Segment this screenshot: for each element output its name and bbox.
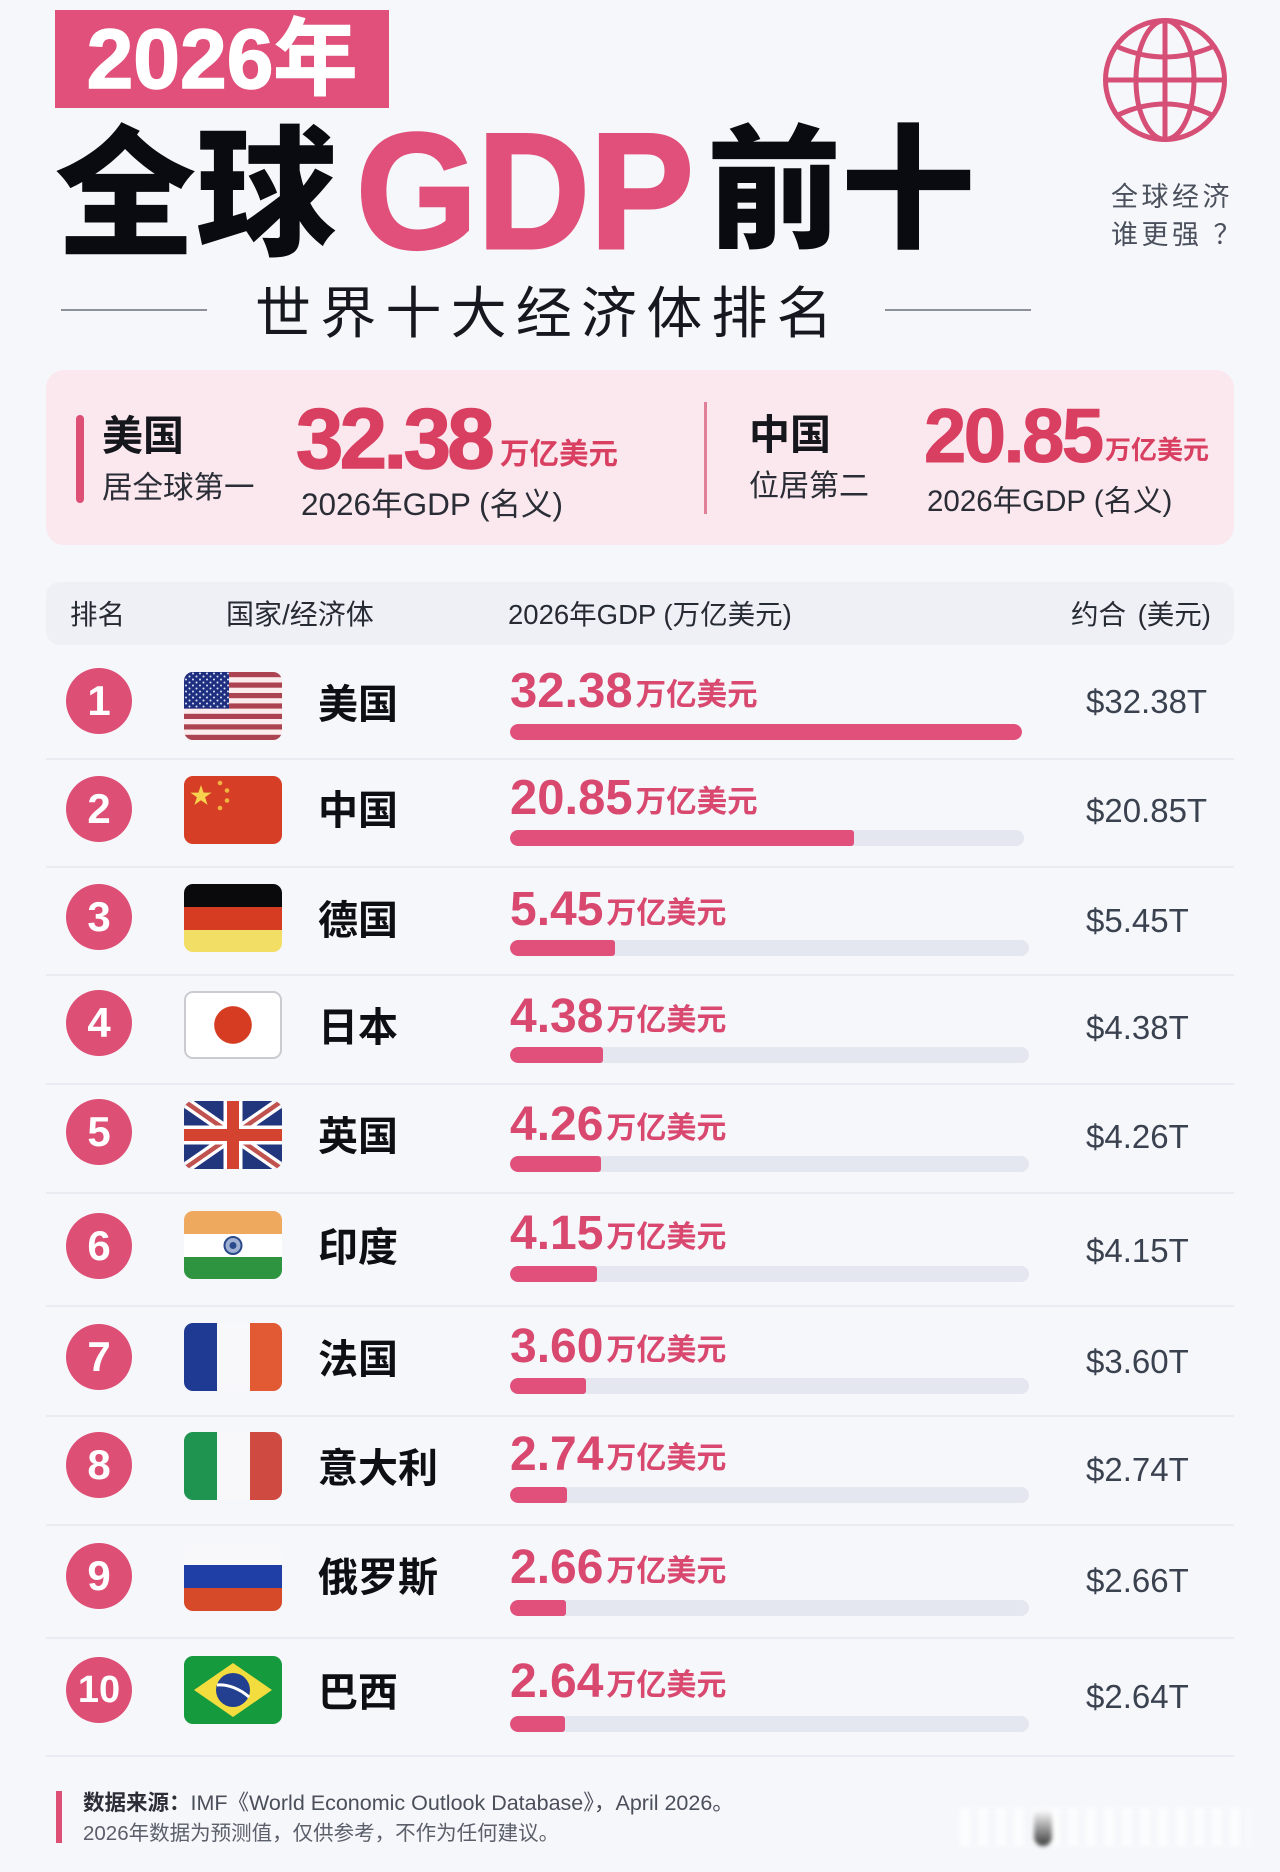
- gdp value: 4.38万亿美元: [510, 990, 726, 1043]
- usd value: $2.64T: [1086, 1678, 1189, 1715]
- rank badge: [66, 668, 132, 734]
- US unit: 万亿美元: [500, 438, 618, 471]
- gdp bar: [510, 1378, 1029, 1394]
- subtitle: 世界十大经济体排名: [255, 282, 842, 345]
- row 10: Brazil: [46, 1637, 1234, 1757]
- row 7: France: [46, 1305, 1234, 1417]
- country name: 中国: [318, 789, 398, 833]
- gdp bar: [510, 724, 1022, 740]
- rank badge: 10: [78, 1669, 120, 1711]
- rank badge: [66, 1213, 132, 1279]
- icon: globe: [1103, 18, 1227, 142]
- icon: France flag: [184, 1323, 282, 1391]
- China unit: 万亿美元: [1105, 435, 1209, 465]
- gdp bar: [510, 1600, 1029, 1616]
- usd value: $4.26T: [1086, 1118, 1189, 1155]
- usd value: $5.45T: [1086, 902, 1189, 939]
- rank badge: [66, 1432, 132, 1498]
- header: usd: 约合 (美元): [1071, 599, 1211, 630]
- gdp bar: [510, 1487, 1029, 1503]
- rank badge: [66, 990, 132, 1056]
- rank badge: [66, 776, 132, 842]
- row 2: China: [46, 758, 1234, 868]
- icon: Brazil flag: [184, 1656, 282, 1724]
- country name: 巴西: [318, 1671, 398, 1715]
- usd value: $32.38T: [1086, 683, 1207, 720]
- gdp value: 2.66万亿美元: [510, 1541, 726, 1594]
- footer line 2: 2026年数据为预测值，仅供参考，不作为任何建议。: [83, 1822, 559, 1845]
- country name: 日本: [318, 1006, 398, 1050]
- header: country: 国家/经济体: [226, 599, 374, 630]
- header: rank: 排名: [70, 599, 125, 630]
- country name: 美国: [318, 683, 398, 727]
- icon: Germany flag: [184, 884, 282, 952]
- icon: Italy flag: [184, 1432, 282, 1500]
- gdp bar: [510, 1266, 1029, 1282]
- usd value: $4.15T: [1086, 1232, 1189, 1269]
- gdp value: 4.26万亿美元: [510, 1098, 726, 1151]
- row 4: Japan: [46, 974, 1234, 1085]
- panel: top two summary: [46, 370, 1234, 545]
- rank badge: 4: [87, 999, 111, 1046]
- China label: 中国: [749, 412, 831, 458]
- country name: 意大利: [318, 1447, 438, 1491]
- rank badge: [66, 884, 132, 950]
- gdp value: 3.60万亿美元: [510, 1320, 726, 1373]
- gdp value: 2.74万亿美元: [510, 1428, 726, 1481]
- rank badge: 2: [87, 785, 111, 832]
- rank badge: [66, 1324, 132, 1390]
- rank badge: 1: [87, 677, 111, 724]
- US rank text: 居全球第一: [102, 471, 254, 505]
- icon: India flag: [184, 1211, 282, 1279]
- rank badge: 3: [87, 893, 111, 940]
- table header: [46, 582, 1234, 645]
- usd value: $3.60T: [1086, 1343, 1189, 1380]
- gdp bar: [510, 1047, 1029, 1063]
- China value: 20.85: [924, 394, 1102, 479]
- globe caption: 谁更强 ？: [1111, 220, 1244, 250]
- gdp value: 2.64万亿美元: [510, 1655, 726, 1708]
- gdp bar: [510, 1716, 1029, 1732]
- row 6: India: [46, 1192, 1234, 1307]
- rank badge: [66, 1657, 132, 1723]
- icon: US flag: [184, 672, 282, 740]
- title GDP: GDP: [356, 99, 694, 283]
- accent bar: [76, 415, 84, 503]
- rank badge: 5: [87, 1108, 111, 1155]
- gdp value: 5.45万亿美元: [510, 883, 726, 936]
- main title: [55, 99, 975, 283]
- row 8: Italy: [46, 1415, 1234, 1526]
- gdp bar: [510, 830, 1024, 846]
- usd value: $4.38T: [1086, 1009, 1189, 1046]
- icon: Japan flag: [184, 991, 282, 1059]
- icon: China flag: [184, 776, 282, 844]
- rank badge: [66, 1099, 132, 1165]
- rank badge: 8: [87, 1441, 111, 1488]
- icon: Russia flag: [184, 1565, 282, 1611]
- gdp value: 32.38万亿美元: [510, 664, 758, 718]
- dark mark: [1034, 1810, 1052, 1846]
- rank badge: 9: [87, 1552, 111, 1599]
- footer line 1: 数据来源：IMF《World Economic Outlook Database》，April 2026。: [83, 1791, 734, 1815]
- rank badge: 6: [87, 1222, 111, 1269]
- footer accent bar: [56, 1791, 62, 1843]
- row 5: UK: [46, 1083, 1234, 1194]
- gdp value: 4.15万亿美元: [510, 1207, 726, 1260]
- divider: [704, 402, 707, 514]
- gdp bar: [510, 1156, 1029, 1172]
- globe caption: [1111, 182, 1244, 250]
- gdp value: 20.85万亿美元: [510, 771, 758, 825]
- rank badge: [66, 1543, 132, 1609]
- country name: 英国: [318, 1115, 398, 1159]
- China rank text: 位居第二: [749, 470, 869, 503]
- China note: 2026年GDP (名义): [927, 485, 1172, 518]
- US note: 2026年GDP (名义): [301, 486, 563, 522]
- rank badge: 7: [87, 1333, 111, 1380]
- title black right: 前十: [707, 117, 975, 266]
- icon: UK flag: [184, 1101, 282, 1169]
- globe caption: 全球经济: [1111, 182, 1233, 212]
- US label: 美国: [102, 413, 184, 459]
- row 3: Germany: [46, 866, 1234, 976]
- watermark smudge: [960, 1808, 1250, 1846]
- title tag: 2026年: 2026年: [87, 12, 357, 106]
- gdp bar: [510, 940, 1029, 956]
- US value: 32.38: [296, 392, 491, 487]
- usd value: $2.66T: [1086, 1562, 1189, 1599]
- row 9: Russia: [46, 1524, 1234, 1639]
- country name: 德国: [318, 899, 398, 943]
- header: gdp: 2026年GDP (万亿美元): [508, 599, 792, 630]
- footer source note: [56, 1791, 734, 1845]
- country name: 法国: [318, 1338, 398, 1382]
- title black left: 全球: [55, 116, 337, 274]
- row 1: USA: [46, 646, 1234, 760]
- usd value: $2.74T: [1086, 1451, 1189, 1488]
- country name: 俄罗斯: [318, 1556, 438, 1600]
- country name: 印度: [318, 1226, 398, 1270]
- usd value: $20.85T: [1086, 792, 1207, 829]
